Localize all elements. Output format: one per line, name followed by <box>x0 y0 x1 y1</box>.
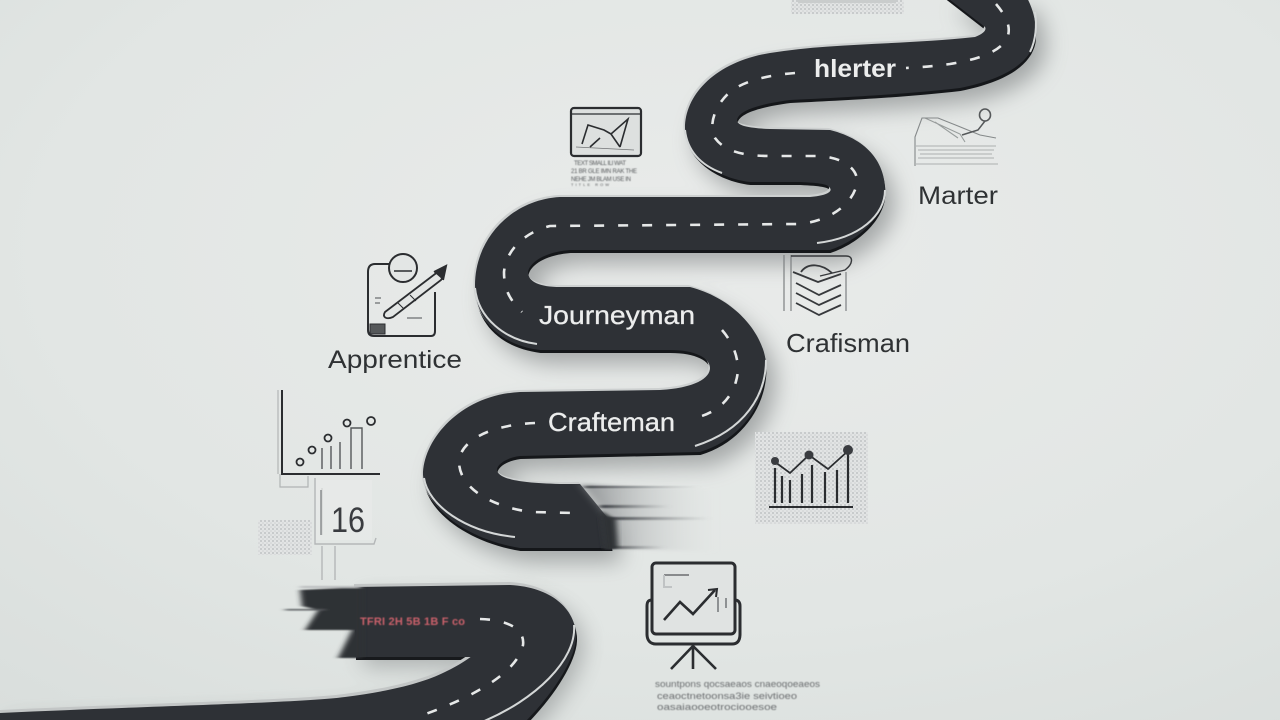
lower road left motion blur <box>285 586 362 658</box>
label: Crafisman: Crafisman <box>786 328 910 358</box>
monitor caption: TITLE ROW <box>571 182 609 187</box>
label: Apprentice: Apprentice <box>328 346 462 374</box>
icon: monitor chart <box>571 108 641 156</box>
road label: hlerter: hlerter <box>814 55 896 83</box>
monitor caption: NEHE JM BLAM USE IN <box>571 177 631 183</box>
icon: number card 16: 16 <box>331 501 365 540</box>
presentation caption: oasaiaooeotrociooesoe <box>657 702 777 712</box>
presentation caption <box>655 679 821 712</box>
icon: layered stack with cap <box>784 255 852 315</box>
label: Marter: Marter <box>918 182 998 210</box>
icon: mountain sketch <box>915 109 998 166</box>
winding road, lower section <box>0 582 584 720</box>
monitor caption: 21 BR GLE IMN RAK THE <box>571 169 637 175</box>
top stipple fragment <box>791 0 904 14</box>
road end motion blur <box>580 484 715 552</box>
icon: number card 16 <box>315 478 376 580</box>
icon: presentation board <box>647 563 740 669</box>
lower road red label: TFRI 2H 5B 1B F co <box>360 616 465 628</box>
road label: Journeyman: Journeyman <box>539 300 695 330</box>
monitor caption: TEXT SMALL ILI WAT <box>574 161 626 167</box>
road centre dashes <box>459 4 1009 513</box>
presentation caption: ceaoctnetoonsa3ie seivtioeo <box>657 691 797 701</box>
icon: notepad and pencil <box>368 254 446 336</box>
icon: scatter and bar chart <box>278 390 380 487</box>
road edge highlights <box>424 12 1036 537</box>
lower road outer highlight <box>482 625 574 720</box>
winding road, upper section <box>422 0 1046 562</box>
lower road dashes <box>420 619 523 716</box>
presentation caption: sountpons qocsaeaos cnaeoqoeaeos <box>655 679 821 689</box>
road label: Crafteman: Crafteman <box>548 407 675 437</box>
icon: stippled bar and line chart <box>755 432 868 524</box>
stipple text patch <box>258 520 312 555</box>
monitor caption <box>571 161 637 187</box>
